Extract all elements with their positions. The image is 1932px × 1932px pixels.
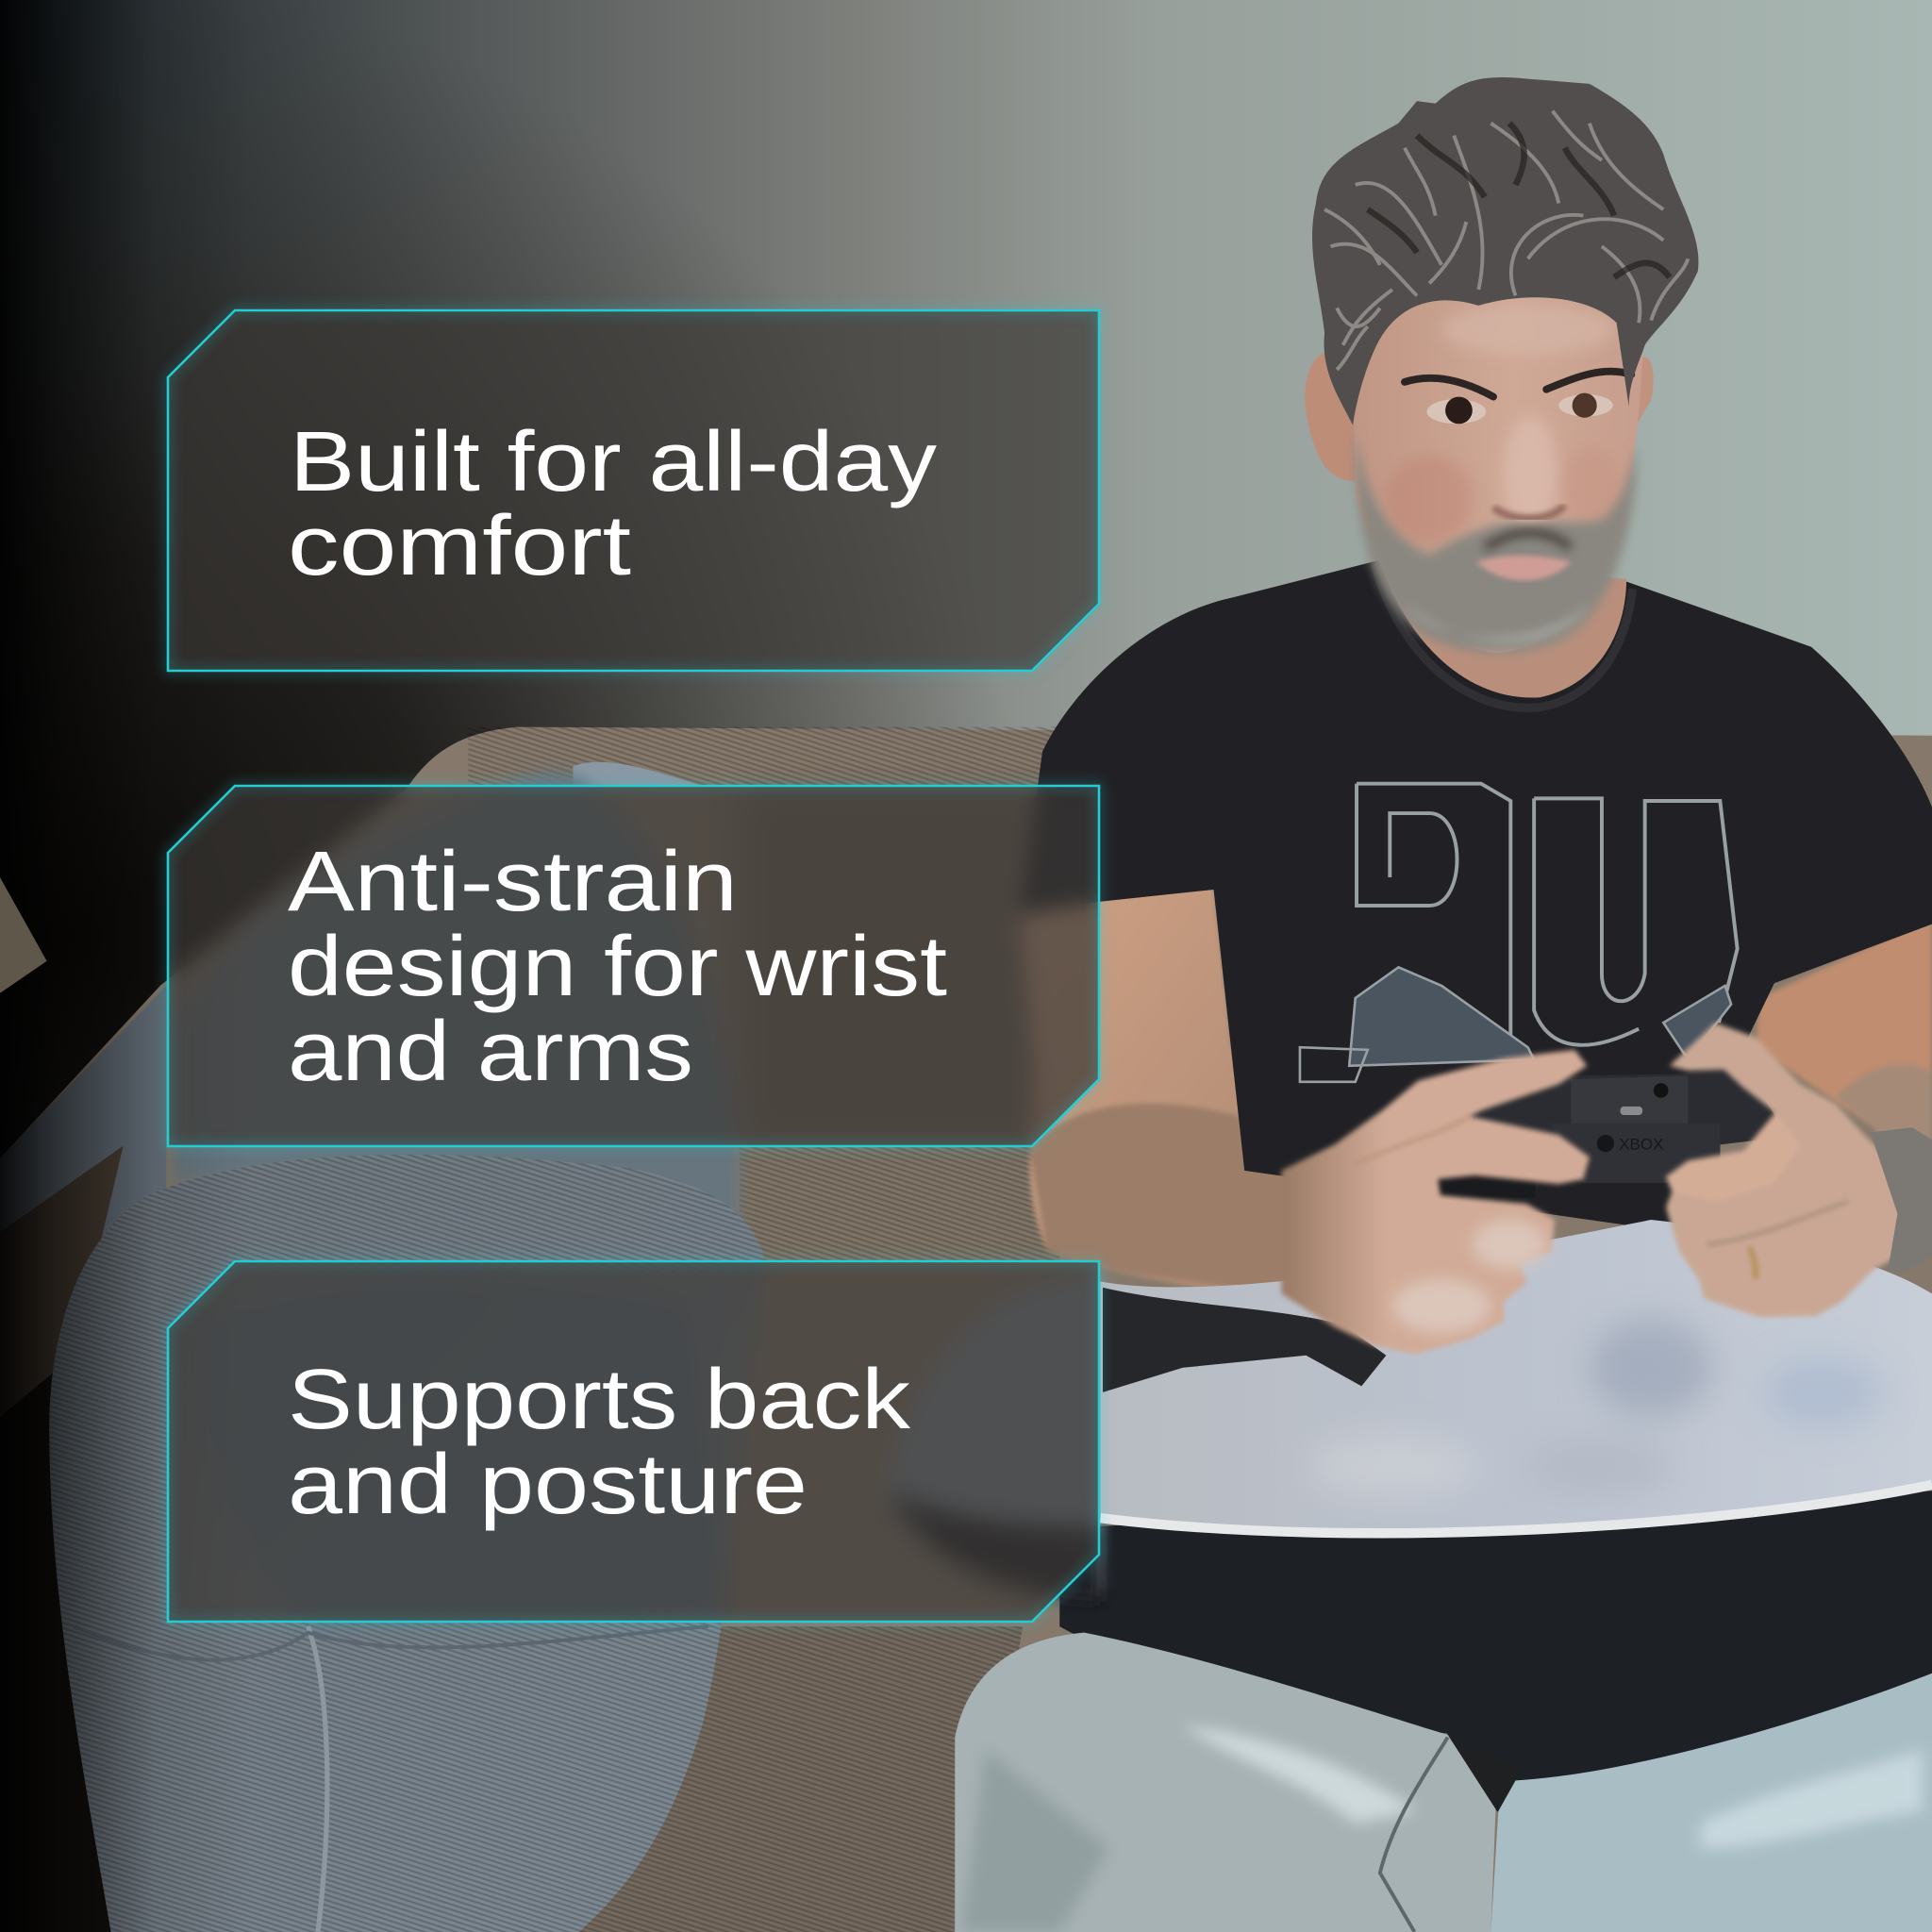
controller button — [1654, 1083, 1668, 1098]
blurred pillow end — [887, 1275, 1100, 1590]
controller logo text: XBOX — [1619, 1136, 1663, 1154]
man: arm left — [1020, 881, 1343, 1306]
blurred upper cushion — [173, 770, 740, 1244]
man: mouth — [1476, 556, 1571, 580]
panel text: anti-strain: design for wrist — [288, 920, 947, 1014]
panel text: comfort — [288, 415, 937, 593]
controller — [1438, 1066, 1775, 1198]
man: pants — [955, 1633, 1932, 1932]
man: nose shadow — [1493, 506, 1565, 519]
man: hair — [1312, 77, 1698, 425]
panel text: posture: and posture — [288, 1438, 808, 1532]
panel text: comfort: Built for all-day — [290, 415, 937, 509]
shirt logo outline — [1357, 784, 1738, 1059]
sofa back — [0, 727, 1932, 1932]
panel text: anti-strain — [288, 835, 947, 1099]
watch — [1871, 1127, 1932, 1272]
panel: back and posture — [160, 1255, 1108, 1629]
man: right hand — [1666, 1023, 1905, 1317]
face shading — [1385, 306, 1622, 543]
controller usb port — [1621, 1107, 1642, 1115]
man: t-shirt — [1020, 560, 1932, 1232]
left sofa arm — [0, 986, 166, 1932]
panel: anti-strain design — [158, 776, 1108, 1153]
panel text: anti-strain: Anti-strain — [288, 835, 738, 929]
man: left hand — [1281, 1050, 1590, 1354]
man: arm right — [1756, 918, 1932, 1214]
panel text: comfort: comfort — [288, 499, 631, 593]
pillow — [887, 1220, 1932, 1824]
shadowed sofa base at lower left — [0, 1356, 148, 1932]
man: beard — [1356, 431, 1637, 653]
sofa seat — [579, 1626, 1023, 1932]
panel text: anti-strain: and arms — [288, 1005, 693, 1099]
pillow mottling — [1306, 1319, 1885, 1496]
panel text: posture — [288, 1353, 911, 1532]
pillow print — [1103, 1288, 1386, 1392]
pillow top — [1100, 1220, 1932, 1534]
man: neck — [1377, 555, 1626, 698]
man: eyes and brows — [1405, 372, 1631, 424]
panel: all-day comfort — [158, 302, 1106, 680]
man: ears — [1305, 348, 1654, 481]
panel text: posture: Supports back — [288, 1353, 911, 1447]
dark gap between legs and pillow — [1441, 1651, 1932, 1824]
man: face — [1353, 271, 1645, 653]
window frame sliver at left — [0, 877, 47, 993]
pillow dark base — [1059, 1491, 1932, 1738]
puma print — [1349, 967, 1534, 1066]
large grey cushion — [49, 1155, 764, 1932]
